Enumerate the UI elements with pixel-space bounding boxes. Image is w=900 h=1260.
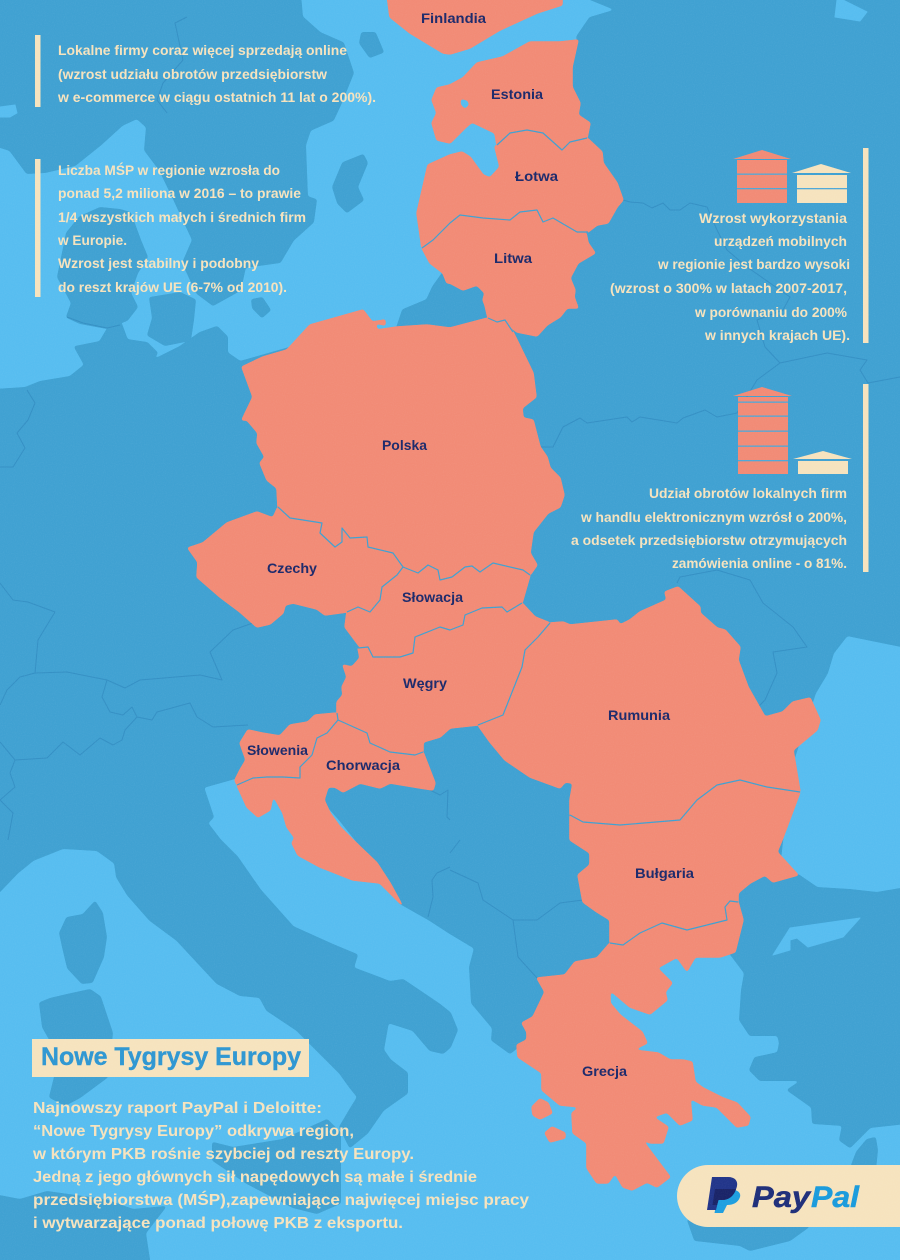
text block: SME count <box>35 159 306 297</box>
PayPal wordmark: Pal <box>811 1181 860 1214</box>
text block: e-commerce share <box>571 384 868 572</box>
country: Chorwacja: Chorwacja <box>326 757 400 773</box>
text block: online sales: Lokalne firmy coraz więcej sprzedają online <box>58 43 347 58</box>
text block: mobile devices: w regionie jest bardzo wysoki <box>657 257 850 272</box>
country: Grecja <box>517 901 750 1190</box>
country: Bułgaria <box>570 780 800 945</box>
icon: PayPal P mark <box>707 1177 740 1213</box>
PayPal logo banner <box>677 1165 900 1227</box>
country: Rumunia <box>478 587 820 825</box>
text block: mobile devices: urządzeń mobilnych <box>714 234 847 249</box>
title <box>32 1039 309 1077</box>
country: Słowenia <box>235 713 338 785</box>
text block: introduction: Najnowszy raport PayPal i Deloitte: <box>33 1100 322 1117</box>
PayPal wordmark: Pay <box>752 1181 811 1214</box>
text block: introduction: przedsiębiorstwa (MŚP),zapewniające najwięcej miejsc pracy <box>33 1191 529 1209</box>
text block: e-commerce share: w handlu elektronicznym wzrósł o 200%, <box>580 510 847 525</box>
text block: online sales: w e-commerce w ciągu ostatnich 11 lat o 200%). <box>57 90 376 105</box>
text block: online sales: (wzrost udziału obrotów przedsiębiorstw <box>58 67 328 82</box>
text block: mobile devices: w porównaniu do 200% <box>694 305 847 320</box>
country: Chorwacja <box>237 720 435 905</box>
PayPal wordmark <box>752 1181 860 1214</box>
text block: SME count: Wzrost jest stabilny i podobny <box>58 256 260 271</box>
icon: houses comparison, e-commerce <box>733 387 852 474</box>
country: Łotwa: Łotwa <box>515 168 558 184</box>
country: Litwa: Litwa <box>494 250 532 266</box>
text block: mobile devices: (wzrost o 300% w latach 2007-2017, <box>610 281 847 296</box>
text block: introduction: i wytwarzające ponad połowę PKB z eksportu. <box>33 1215 403 1232</box>
country: Polska: Polska <box>382 437 427 453</box>
text block: introduction <box>32 1100 529 1232</box>
text block: e-commerce share: a odsetek przedsiębiorstw otrzymujących <box>571 533 847 548</box>
country: Łotwa <box>417 130 623 248</box>
country: Słowenia: Słowenia <box>247 742 308 758</box>
text block: SME count: 1/4 wszystkich małych i średnich firm <box>58 210 306 225</box>
country: Litwa <box>422 210 595 336</box>
text block: e-commerce share: zamówienia online - o 81%. <box>672 556 847 571</box>
country: Słowacja: Słowacja <box>402 589 463 605</box>
text block: SME count: w Europie. <box>57 233 127 248</box>
country: Czechy: Czechy <box>267 560 317 576</box>
text block: mobile devices: Wzrost wykorzystania <box>699 211 848 226</box>
country: Finlandia <box>387 0 562 54</box>
text block: introduction: “Nowe Tygrysy Europy” odkrywa region, <box>33 1123 354 1140</box>
country borders <box>237 130 800 945</box>
text block: introduction: Jedną z jego głównych sił napędowych są małe i średnie <box>33 1169 477 1186</box>
country: Słowacja <box>345 563 530 657</box>
country: Estonia: Estonia <box>491 86 543 102</box>
country: Bułgaria: Bułgaria <box>635 865 694 881</box>
icon: houses comparison, mobile use <box>733 150 851 203</box>
text block: SME count: do reszt krajów UE (6-7% od 2010). <box>58 280 287 295</box>
country: Czechy <box>188 507 403 627</box>
country: Finlandia: Finlandia <box>421 10 486 26</box>
text block: e-commerce share: Udział obrotów lokalnych firm <box>649 486 847 501</box>
text block: SME count: Liczba MŚP w regionie wzrosła do <box>58 163 280 178</box>
text block: SME count: ponad 5,2 miliona w 2016 – to prawie <box>58 186 302 201</box>
title: Nowe Tygrysy Europy <box>41 1043 301 1071</box>
country: Polska <box>242 310 564 580</box>
country: Węgry <box>337 603 550 755</box>
country: Rumunia: Rumunia <box>608 707 670 723</box>
country: Estonia <box>432 40 590 150</box>
text block: introduction: w którym PKB rośnie szybciej od reszty Europy. <box>32 1146 414 1163</box>
country: Węgry: Węgry <box>403 675 447 691</box>
text block: online sales <box>35 35 376 107</box>
country: Grecja: Grecja <box>582 1063 627 1079</box>
text block: mobile devices <box>610 148 868 343</box>
text block: mobile devices: w innych krajach UE). <box>704 328 850 343</box>
